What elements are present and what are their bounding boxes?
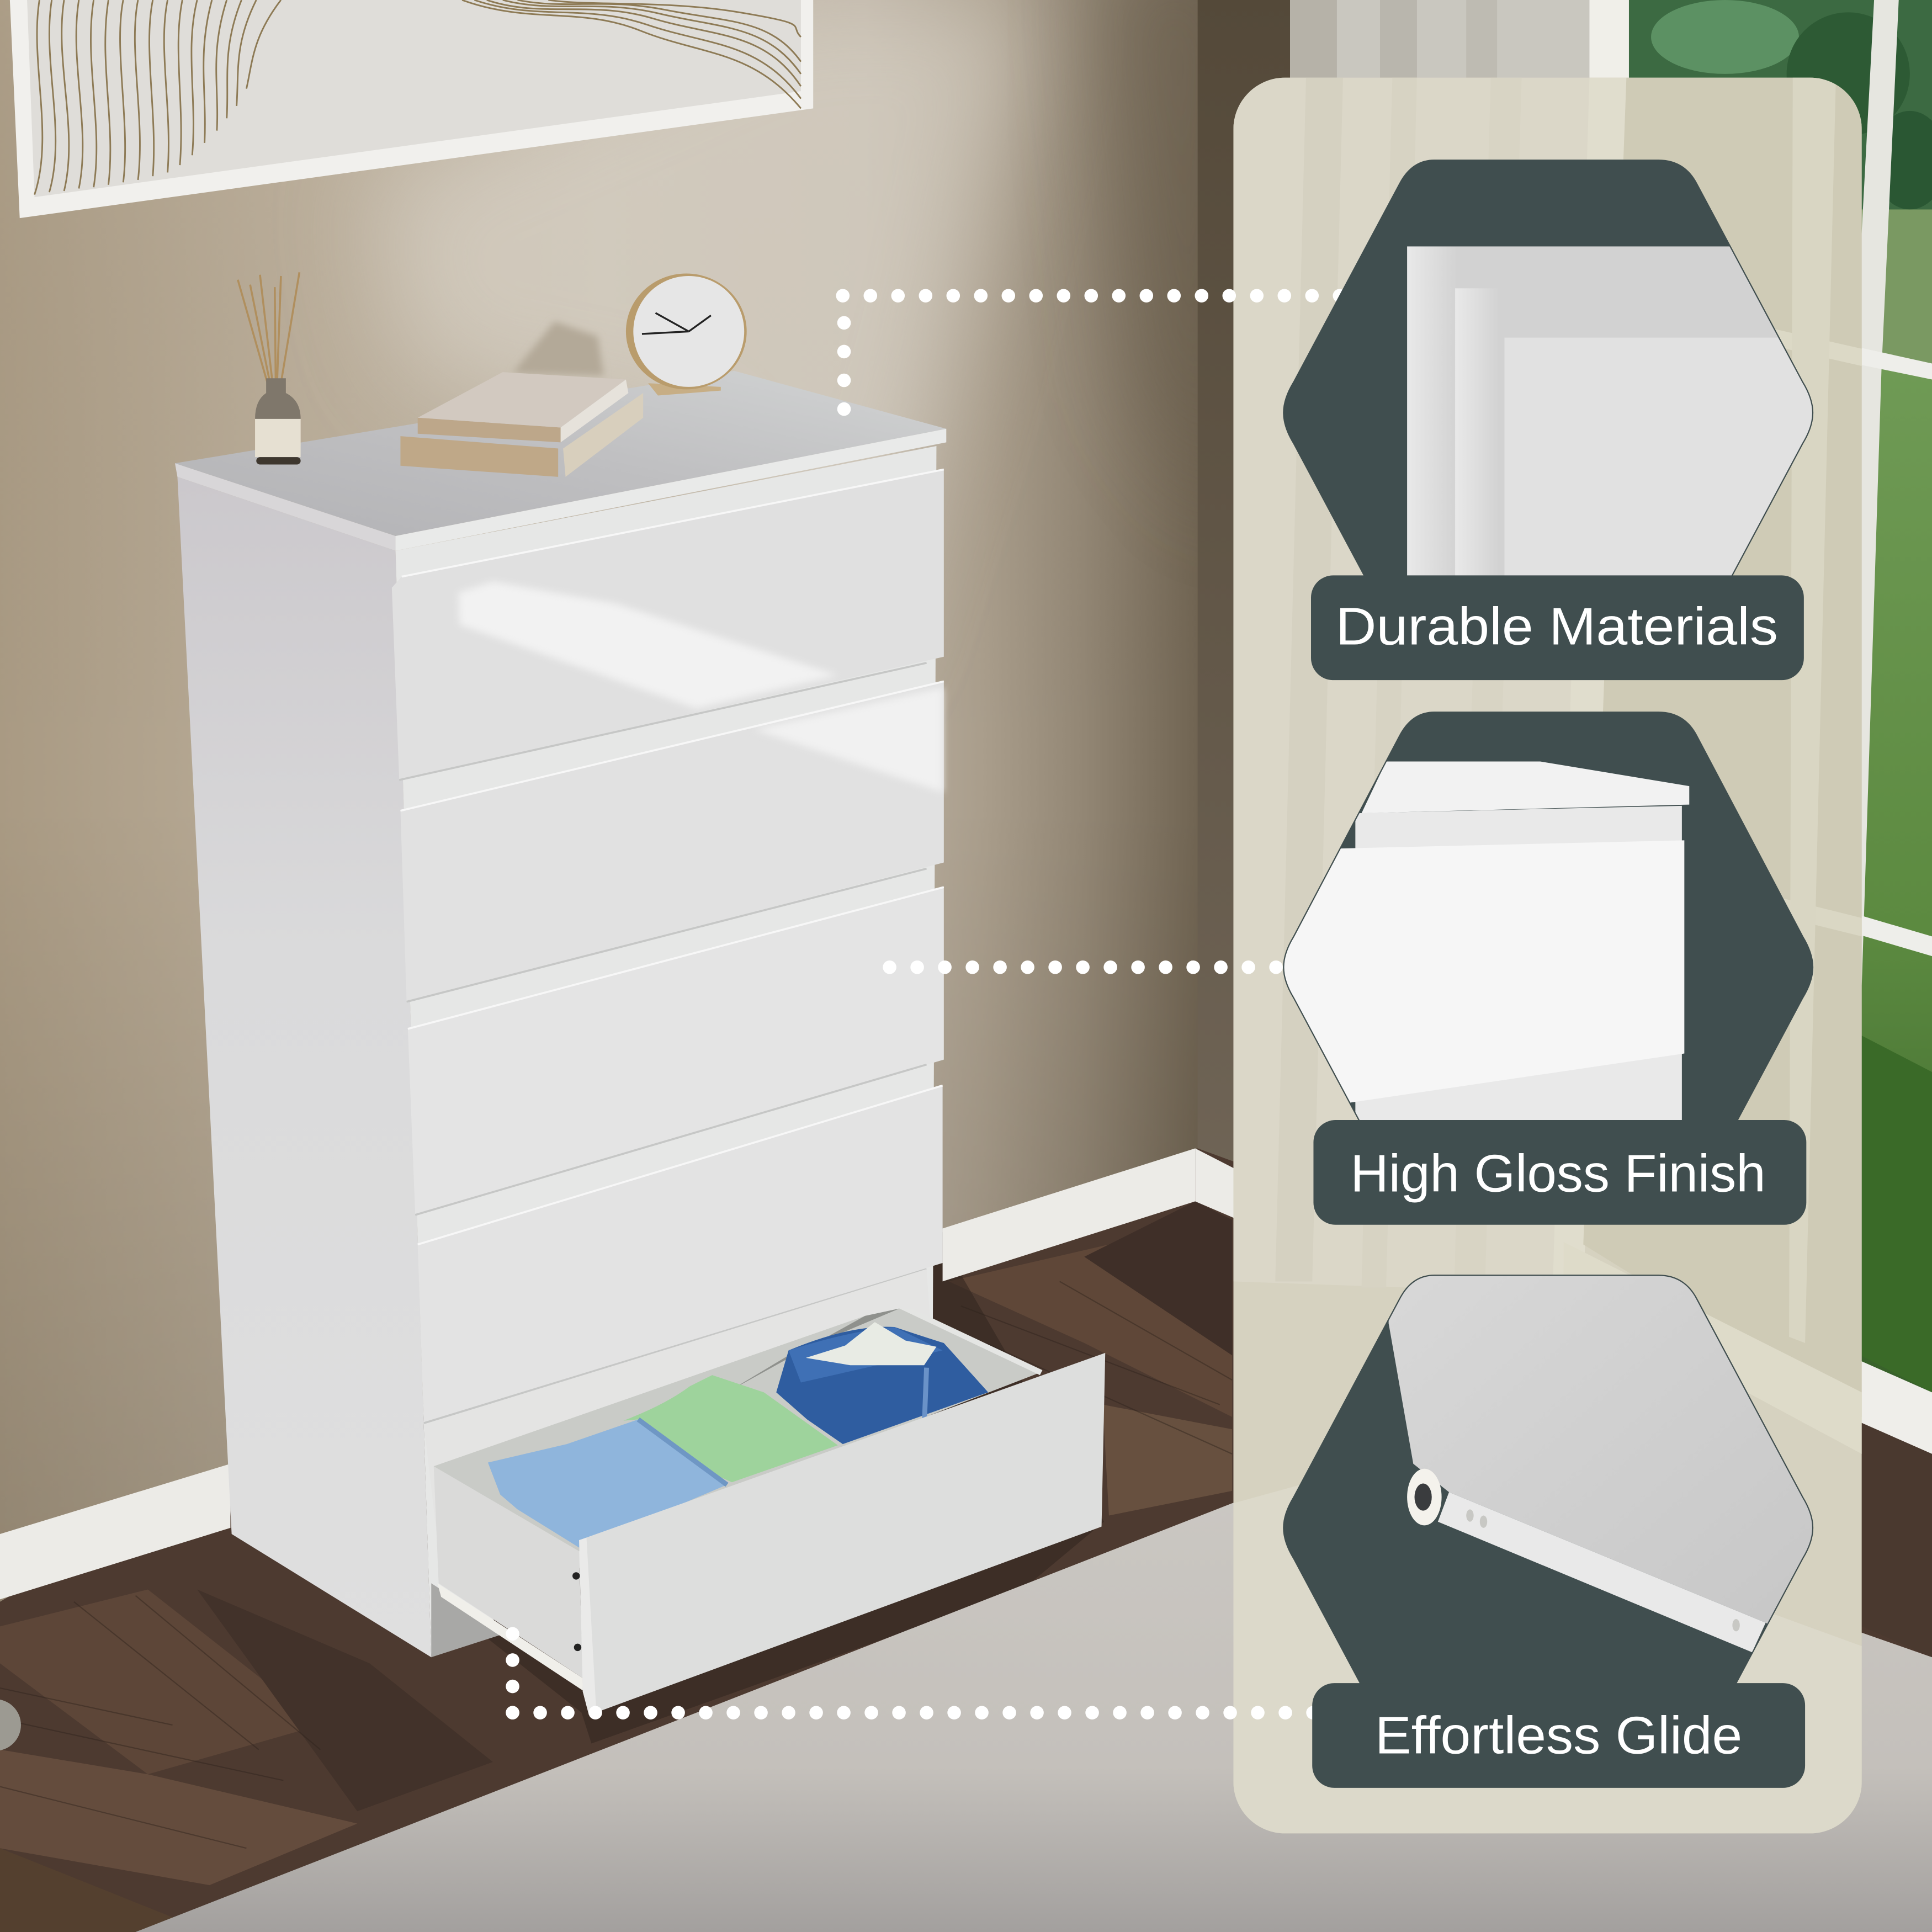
- drawer 1: [392, 469, 944, 780]
- rug through panel: [1233, 1466, 1862, 1833]
- hexagon outline: [1283, 160, 1813, 665]
- hexagon outline: [1283, 1275, 1813, 1780]
- material sheets: [1407, 246, 1812, 575]
- drawer 2: [400, 681, 944, 1002]
- feature: durable materials: [1283, 160, 1826, 680]
- top front edge: [396, 429, 946, 551]
- curtain through panel: [1233, 77, 1490, 1281]
- room background: [0, 0, 1294, 1602]
- top left edge: [175, 463, 396, 551]
- label: [1312, 1683, 1805, 1788]
- drawer front end: [579, 1538, 596, 1715]
- hexagon: [1283, 1275, 1813, 1780]
- curtain: [1290, 0, 1629, 86]
- screws: [572, 1572, 580, 1580]
- connector: high gloss finish: [890, 964, 1284, 970]
- label: Effortless Glide: [1375, 1706, 1742, 1765]
- jeans: denim: [488, 1419, 727, 1548]
- decor: reed diffuser: [238, 272, 301, 465]
- label: [1313, 1120, 1806, 1225]
- label: [1311, 575, 1804, 680]
- label: High Gloss Finish: [1350, 1144, 1766, 1203]
- connector: effortless glide: [513, 1634, 1318, 1713]
- inner opening: [424, 1269, 933, 1540]
- hexagon: [1283, 160, 1813, 665]
- feature: effortless glide: [1283, 1269, 1824, 1788]
- chest of drawers: [175, 371, 1105, 1715]
- framed wall art: [10, 0, 813, 218]
- hexagon outline: [1283, 712, 1813, 1220]
- feature panel: [1233, 78, 1862, 1833]
- runner close-up: [1389, 1269, 1824, 1657]
- gloss reflection 2: [754, 688, 943, 792]
- lower plinth: [431, 1583, 508, 1657]
- open drawer interior: [434, 1309, 1040, 1551]
- drawer slide rail: [437, 1583, 583, 1690]
- window and garden: [1626, 0, 1932, 1657]
- drawer 3: [408, 887, 944, 1215]
- drawer front: [579, 1353, 1105, 1715]
- floor: [0, 1148, 1932, 1932]
- hexagon: [1283, 712, 1813, 1220]
- chest top: [175, 371, 946, 536]
- gloss close-up: [1269, 761, 1689, 1121]
- drawer edge lines: [399, 469, 944, 1423]
- open drawer side: [434, 1466, 583, 1678]
- feature: high gloss finish: [1269, 712, 1813, 1225]
- window through panel: [1583, 78, 1862, 1417]
- yellow edge: [696, 1466, 727, 1488]
- connector: durable materials: [843, 296, 1343, 409]
- drawer 4: [418, 1086, 943, 1423]
- rug: [136, 1460, 1932, 1932]
- chest front frame: [396, 446, 936, 1657]
- gloss reflection: [458, 582, 838, 708]
- shirt: green: [623, 1375, 838, 1482]
- baseboards: [0, 1148, 1238, 1599]
- hoodie: blue: [776, 1322, 988, 1444]
- decor: clock: [626, 274, 747, 396]
- chest side panel: [177, 477, 431, 1657]
- label: Durable Materials: [1336, 597, 1778, 656]
- decor: books: [400, 372, 643, 477]
